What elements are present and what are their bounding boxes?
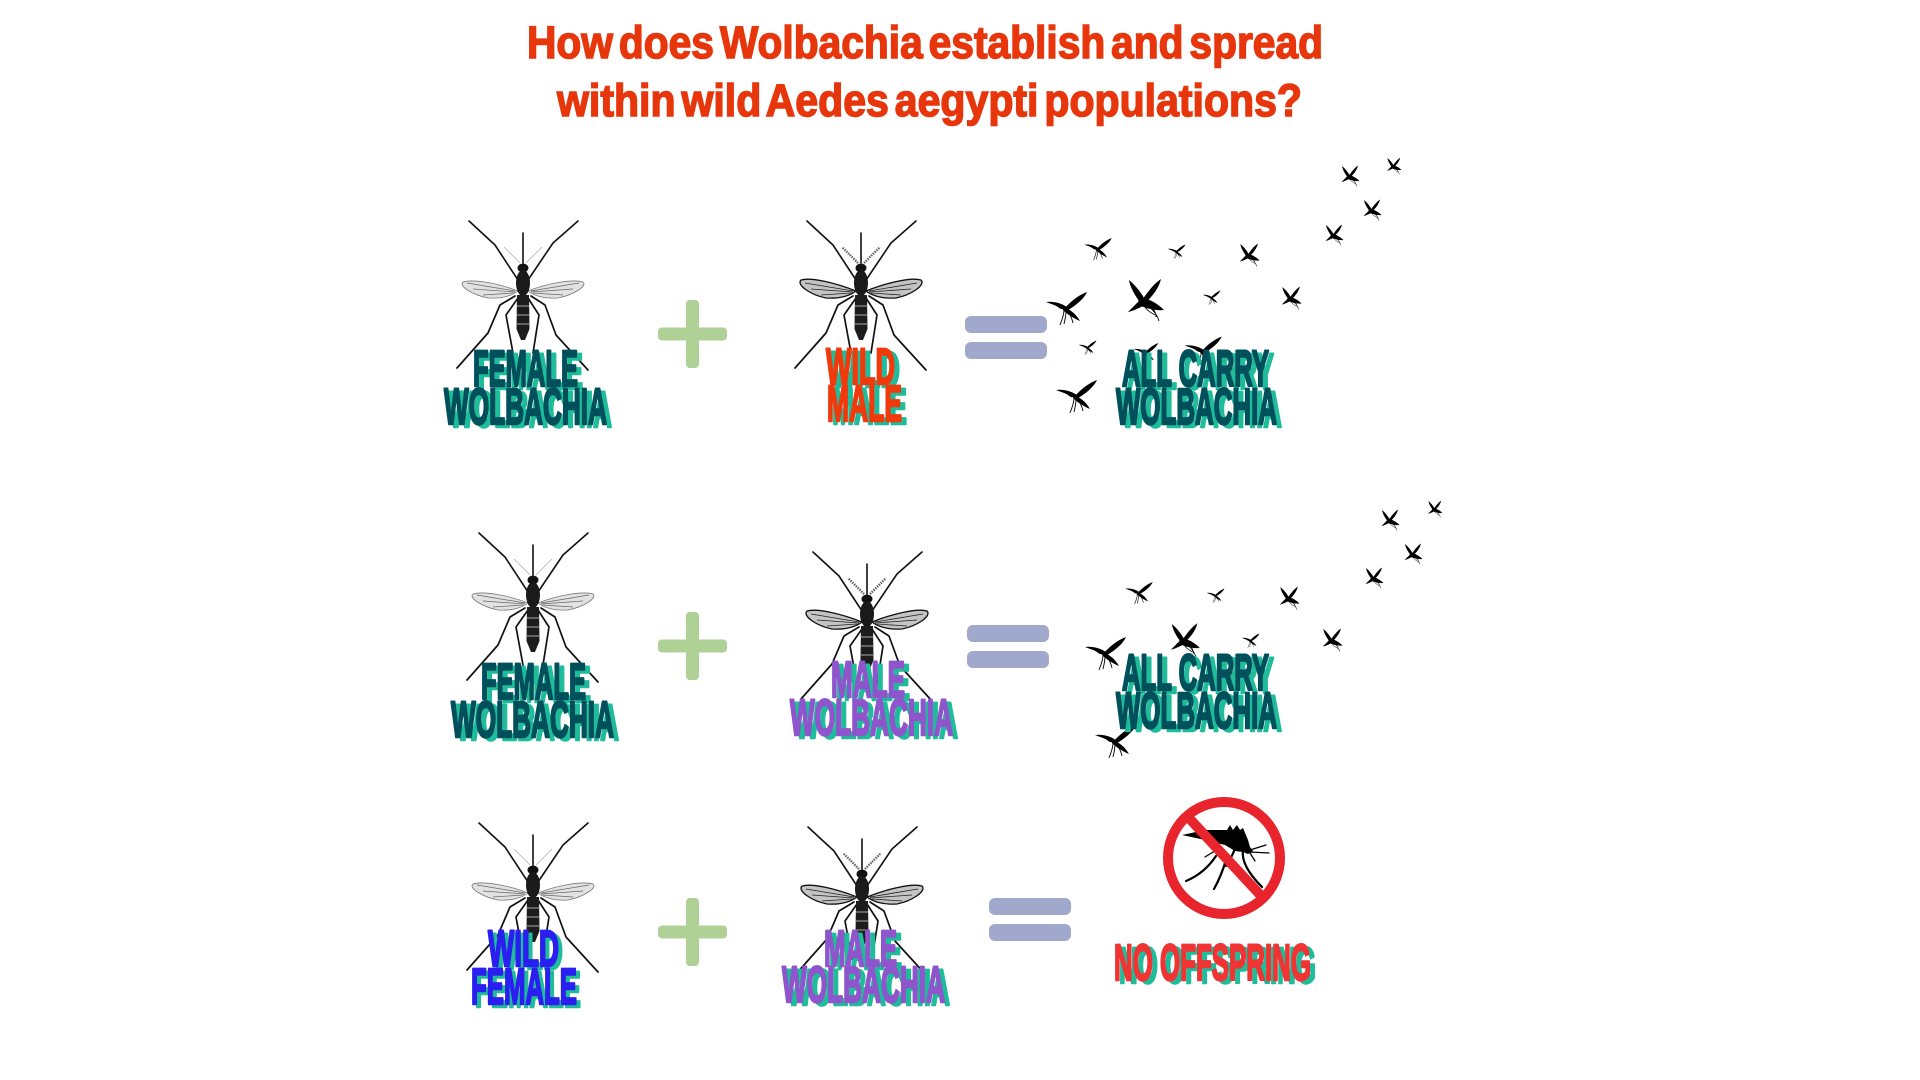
label: female Wolbachia — [451, 653, 619, 751]
mosquito: male Wolbachia — [796, 827, 927, 976]
label: female Wolbachia: FEMALE — [473, 340, 578, 397]
label: wild male: MALE — [832, 378, 907, 435]
label: female Wolbachia: FEMALE — [486, 656, 591, 713]
swarm: flying mosquitoes — [1046, 158, 1401, 413]
label: no offspring: NO OFFSPRING — [1114, 934, 1311, 991]
label: all carry Wolbachia: WOLBACHIA — [1121, 381, 1282, 438]
label: wild female — [471, 920, 581, 1018]
label: male Wolbachia — [782, 920, 950, 1016]
label: male Wolbachia — [790, 651, 958, 749]
row 3: wild female plus male Wolbachia — [467, 802, 1316, 1018]
label: wild male — [826, 338, 907, 435]
label: male Wolbachia: MALE — [829, 923, 902, 980]
icon: equals — [967, 625, 1049, 668]
label: male Wolbachia: MALE — [836, 654, 910, 711]
mosquito: wild male — [795, 221, 926, 370]
label: all carry Wolbachia: ALL CARRY — [1127, 647, 1274, 704]
swarm: flying mosquitoes — [1085, 501, 1442, 758]
label: wild male: WILD — [831, 341, 900, 398]
icon: no mosquito sign — [1168, 802, 1280, 914]
mosquito: female Wolbachia — [467, 533, 598, 682]
label: male Wolbachia: MALE — [824, 920, 897, 977]
label: all carry Wolbachia — [1116, 340, 1282, 438]
label: female Wolbachia: WOLBACHIA — [449, 381, 612, 438]
label: male Wolbachia: WOLBACHIA — [795, 692, 958, 749]
label: male Wolbachia: MALE — [831, 651, 905, 708]
label: all carry Wolbachia: WOLBACHIA — [1121, 685, 1282, 742]
label: wild female: WILD — [488, 920, 559, 977]
row 1: female Wolbachia plus wild male — [444, 158, 1401, 438]
label: female Wolbachia: WOLBACHIA — [444, 378, 607, 435]
mosquito: female Wolbachia — [457, 221, 588, 370]
icon: plus — [658, 898, 727, 966]
label: male Wolbachia: WOLBACHIA — [787, 959, 950, 1016]
title — [527, 17, 1323, 126]
mosquito: wild female — [467, 823, 598, 972]
label: female Wolbachia: FEMALE — [478, 343, 583, 400]
mosquito: male Wolbachia — [801, 552, 932, 701]
label: all carry Wolbachia: WOLBACHIA — [1116, 682, 1277, 739]
label: all carry Wolbachia — [1116, 644, 1282, 742]
title: How does Wolbachia establish and spread — [527, 17, 1323, 68]
icon: equals — [965, 316, 1047, 359]
label: no offspring — [1114, 934, 1316, 994]
label: wild female: FEMALE — [475, 961, 581, 1018]
label: wild female: WILD — [492, 923, 563, 980]
label: female Wolbachia — [444, 340, 612, 438]
label: all carry Wolbachia: WOLBACHIA — [1116, 378, 1277, 435]
label: male Wolbachia: WOLBACHIA — [790, 689, 953, 746]
label: all carry Wolbachia: ALL CARRY — [1127, 343, 1274, 400]
icon: plus — [658, 612, 727, 680]
label: all carry Wolbachia: ALL CARRY — [1122, 644, 1269, 701]
label: female Wolbachia: WOLBACHIA — [456, 694, 619, 751]
icon: plus — [658, 300, 727, 368]
title: within wild Aedes aegypti populations? — [556, 75, 1302, 126]
label: wild male: WILD — [826, 338, 895, 395]
label: female Wolbachia: FEMALE — [481, 653, 586, 710]
label: male Wolbachia: WOLBACHIA — [782, 956, 945, 1013]
label: wild male: MALE — [827, 375, 902, 432]
label: female Wolbachia: WOLBACHIA — [451, 691, 614, 748]
label: no offspring: NO OFFSPRING — [1119, 937, 1316, 994]
label: wild female: FEMALE — [471, 958, 577, 1015]
row 2: female Wolbachia plus male Wolbachia — [451, 501, 1442, 758]
icon: equals — [989, 898, 1071, 941]
label: all carry Wolbachia: ALL CARRY — [1122, 340, 1269, 397]
